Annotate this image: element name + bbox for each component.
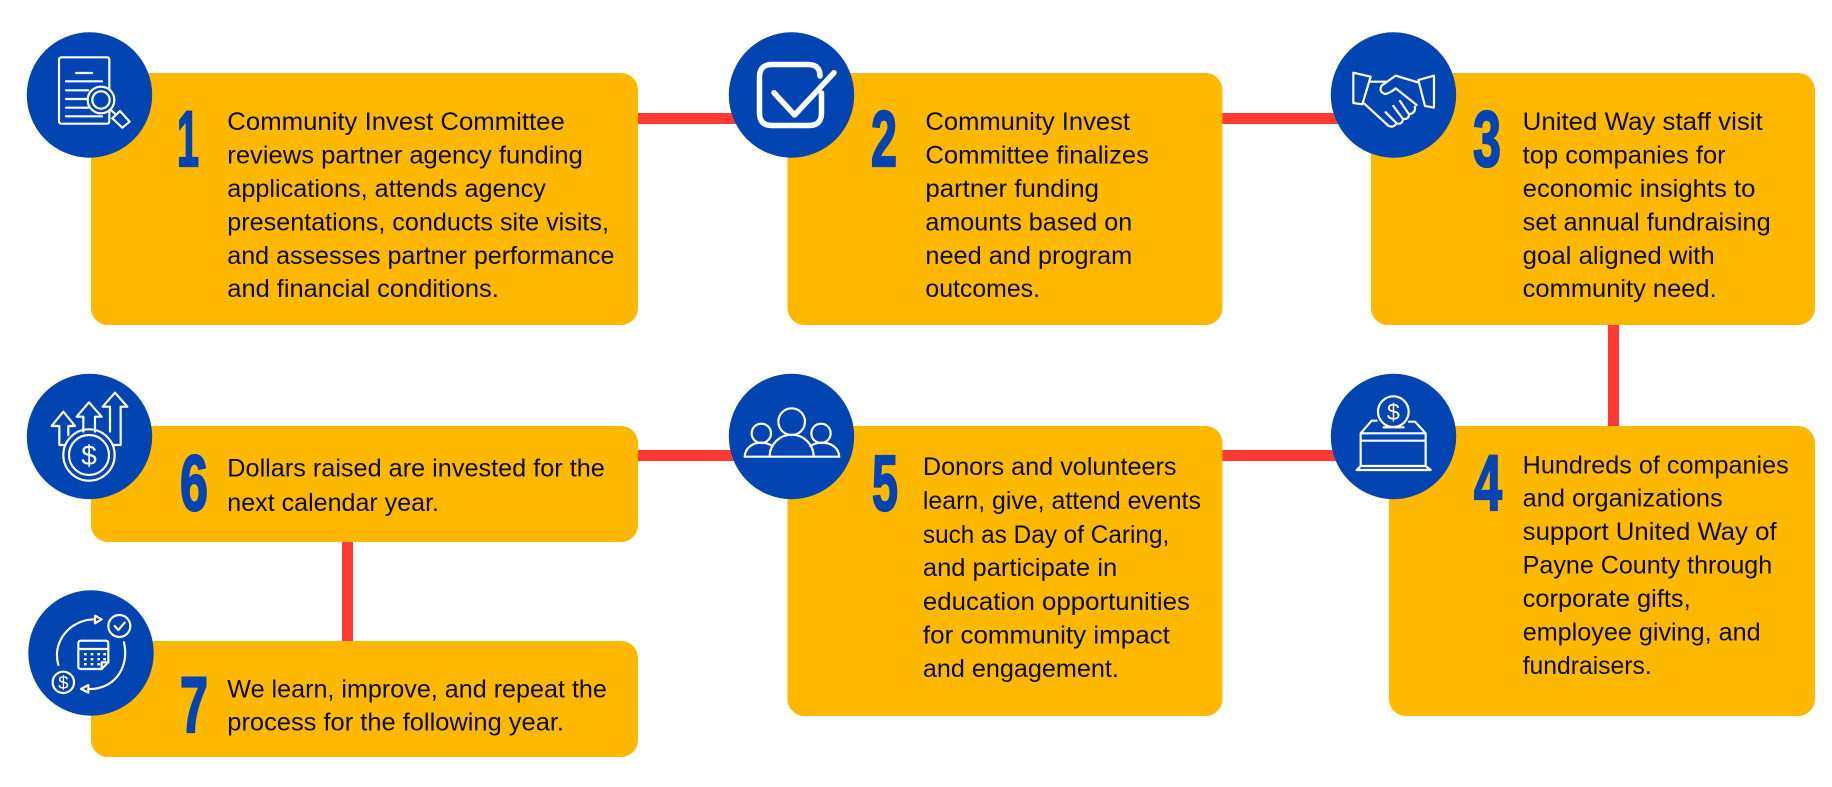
text: step 5 description: such as Day of Caring, <box>923 521 1169 549</box>
text: step 5 description: learn, give, attend events <box>923 487 1201 515</box>
text: step 3 description: goal aligned with <box>1523 242 1715 270</box>
icon: checkbox <box>729 32 854 158</box>
text: step 2 description: outcomes. <box>925 275 1040 303</box>
text: step 5 description: for community impact <box>923 621 1170 649</box>
icon: donation box: $ <box>1387 399 1400 425</box>
icon: group of people <box>729 374 854 499</box>
text: step 3 description: economic insights to <box>1523 175 1756 203</box>
icon: donation box <box>1331 374 1456 499</box>
panel: step 1 <box>91 73 638 325</box>
icon: document with magnifier <box>27 32 152 158</box>
text: step 4 description: fundraisers. <box>1523 652 1652 680</box>
text: step 3 description: top companies for <box>1523 142 1726 170</box>
text: step 5 description: and engagement. <box>923 655 1119 683</box>
connector: step 2 to 3 <box>1215 113 1345 124</box>
panel: step 7 <box>91 641 638 757</box>
text: step 2 description <box>925 108 1149 303</box>
icon: coin with rising arrows <box>27 374 152 499</box>
text: step 4 description <box>1523 451 1789 680</box>
text: step 4 description: employee giving, and <box>1523 618 1761 646</box>
panel: step 5 <box>788 426 1222 716</box>
text: step 3 description <box>1523 108 1771 303</box>
icon: handshake <box>1331 32 1456 158</box>
connector: step 5 to 6 <box>630 450 740 461</box>
text: step 5 description: Donors and volunteers <box>923 453 1176 481</box>
panel: step 4 <box>1389 426 1815 716</box>
text: step 2 description: need and program <box>925 242 1132 270</box>
text: step 6 description <box>227 455 605 517</box>
text: step 5 description: education opportunities <box>923 588 1190 616</box>
text: step 6 description: Dollars raised are invested for the <box>227 455 605 483</box>
text: step 1 description: Community Invest Committee <box>227 108 565 136</box>
connector: step 3 to 4 <box>1608 318 1619 433</box>
number 2: 2 <box>871 94 897 183</box>
icon: annual cycle calendar: $ <box>58 672 69 693</box>
connector: step 1 to 2 <box>630 113 740 124</box>
text: step 1 description: reviews partner agency funding <box>227 142 583 170</box>
number 4: 4 <box>1474 438 1502 527</box>
text: step 4 description: support United Way of <box>1523 518 1777 546</box>
text: step 2 description: Community Invest <box>925 108 1130 136</box>
text: step 4 description: Payne County through <box>1523 551 1772 579</box>
text: step 2 description: amounts based on <box>925 208 1132 236</box>
text: step 7 description: We learn, improve, and repeat the <box>227 676 607 704</box>
icon: coin with rising arrows: $ <box>81 440 97 471</box>
panel: step 2 <box>788 73 1222 325</box>
panel: step 6 <box>91 426 638 542</box>
text: step 2 description: partner funding <box>925 175 1099 203</box>
text: step 4 description: Hundreds of companies <box>1523 451 1789 479</box>
text: step 1 description: and financial conditions. <box>227 275 499 303</box>
text: step 5 description: and participate in <box>923 554 1117 582</box>
text: step 3 description: set annual fundraising <box>1523 208 1771 236</box>
text: step 4 description: and organizations <box>1523 484 1723 512</box>
text: step 4 description: corporate gifts, <box>1523 585 1691 613</box>
text: step 2 description: Committee finalizes <box>925 142 1149 170</box>
text: step 1 description: and assesses partner performance <box>227 242 615 270</box>
text: step 7 description: process for the following year. <box>227 709 564 737</box>
text: step 1 description <box>227 108 615 303</box>
number 5: 5 <box>872 438 898 527</box>
text: step 5 description <box>923 453 1201 683</box>
connector: step 4 to 5 <box>1215 450 1345 461</box>
icon: annual cycle calendar <box>28 590 154 716</box>
text: step 6 description: next calendar year. <box>227 489 439 517</box>
text: step 1 description: presentations, conducts site visits, <box>227 208 609 236</box>
connector: step 6 to 7 <box>342 535 353 648</box>
panel: step 3 <box>1371 73 1815 325</box>
number 1: 1 <box>177 94 199 183</box>
number 3: 3 <box>1473 94 1501 183</box>
number 7: 7 <box>180 660 208 749</box>
text: step 7 description <box>227 676 607 737</box>
text: step 3 description: community need. <box>1523 275 1717 303</box>
text: step 3 description: United Way staff visit <box>1523 108 1763 136</box>
text: step 1 description: applications, attends agency <box>227 175 546 203</box>
number 6: 6 <box>180 438 208 527</box>
